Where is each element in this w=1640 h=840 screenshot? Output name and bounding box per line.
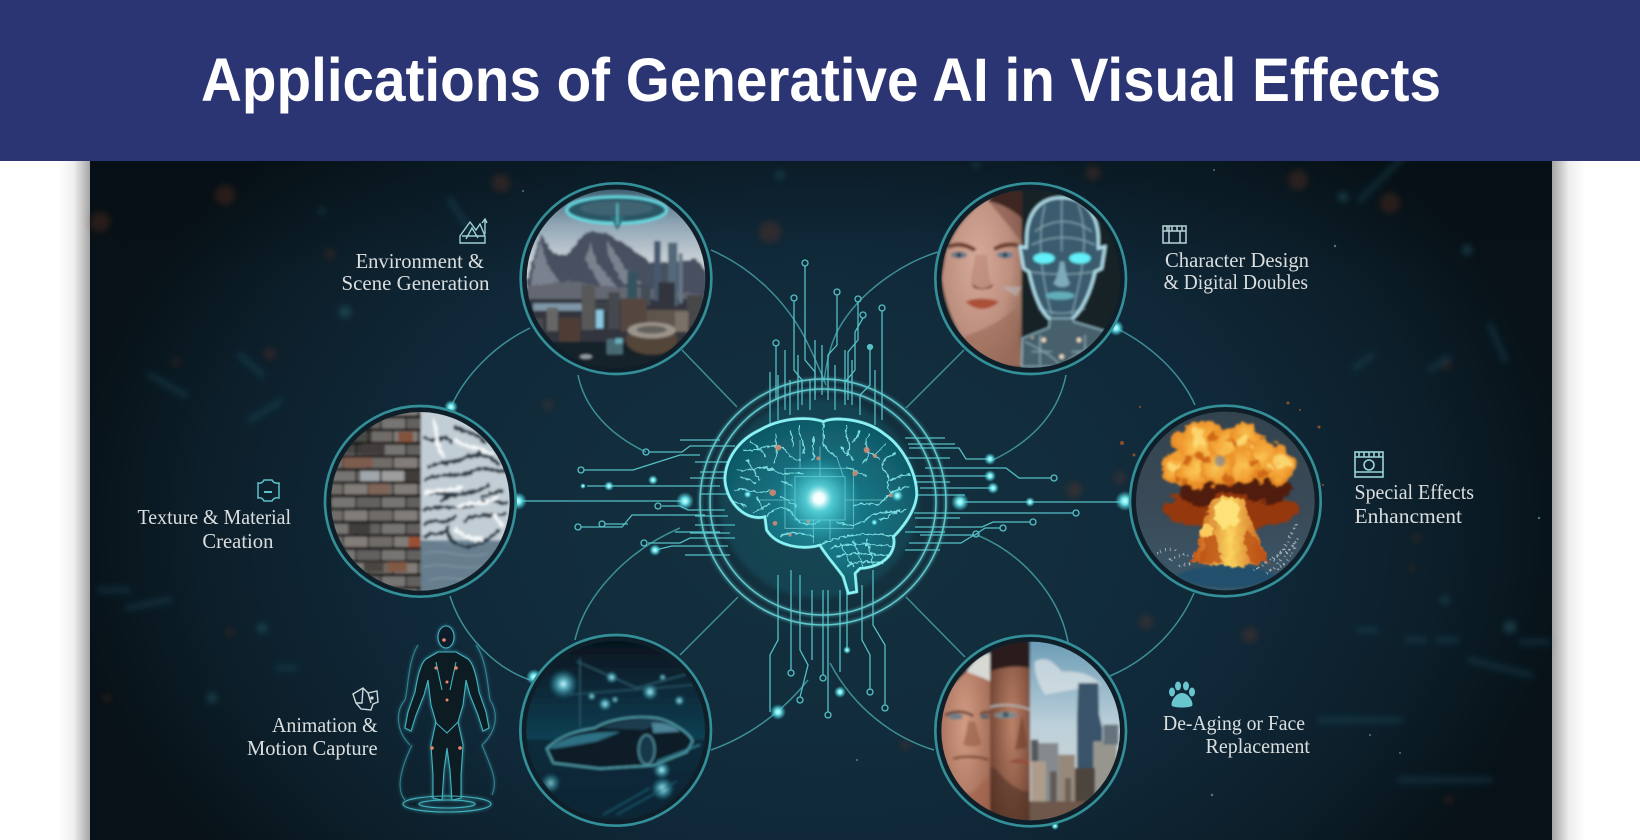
- topic: special effects enhancement: [1120, 402, 1474, 597]
- brain microchip core: [760, 440, 887, 543]
- label: [342, 249, 490, 295]
- label: [247, 713, 378, 760]
- icon: ornate frame: [258, 480, 279, 501]
- topic: environment and scene generation: [342, 183, 711, 382]
- picture circle: split faces and skyline: [935, 636, 1127, 830]
- circuit traces: left side: [518, 440, 735, 555]
- icon: paw print: [1169, 682, 1195, 708]
- label: Character Design: [1165, 248, 1309, 272]
- topic: de-aging or face replacement: [935, 636, 1310, 830]
- circuit traces: right side: [905, 438, 1125, 550]
- label: Special Effects: [1354, 480, 1474, 504]
- icon: dice cluster: [353, 688, 378, 710]
- header banner: [0, 0, 1640, 161]
- circuit traces: top: [770, 260, 885, 430]
- label: Motion Capture: [247, 736, 378, 760]
- picture circle: explosion: [1130, 406, 1321, 597]
- label: [1163, 711, 1310, 758]
- label: Enhancment: [1354, 504, 1462, 528]
- picture circle: sports car: [520, 635, 711, 826]
- picture circle: mountains and city: [521, 183, 711, 382]
- circuit traces: bottom: [770, 570, 888, 718]
- connecting arcs between topic circles: [450, 250, 1195, 750]
- flying embers: [1120, 402, 1324, 486]
- motion capture figure: [398, 626, 495, 812]
- label: [1354, 480, 1474, 528]
- label: De-Aging or Face: [1163, 711, 1305, 735]
- brain central light: [777, 457, 861, 540]
- picture circle: face and wireframe head: [935, 183, 1128, 375]
- label: Replacement: [1206, 734, 1310, 758]
- topic: character design and digital doubles: [935, 183, 1309, 375]
- icon: film clapper: [1163, 226, 1186, 243]
- label: Environment &: [356, 249, 484, 273]
- floating saucer: [567, 197, 667, 230]
- panel: dark technology backdrop: [90, 140, 1552, 840]
- bokeh and streak particles: [90, 140, 1548, 804]
- label: [138, 505, 291, 553]
- left panel shadow: [58, 161, 90, 840]
- label: [1164, 248, 1309, 294]
- capture markers: [430, 638, 462, 750]
- central rings: [700, 379, 946, 625]
- glowing circuit nodes: [444, 320, 1135, 830]
- brain hot spots: [769, 445, 893, 537]
- brain folds: [730, 422, 910, 567]
- right panel shadow: [1552, 161, 1586, 840]
- brain outline: [725, 419, 917, 593]
- label: Creation: [202, 529, 274, 553]
- particle sparks: [522, 169, 1540, 796]
- icon: mountain chart: [460, 219, 487, 243]
- label: & Digital Doubles: [1164, 270, 1308, 294]
- central glowing brain: [719, 398, 919, 598]
- topic: animation and motion capture: [247, 626, 711, 826]
- icon: film frame with camera: [1355, 452, 1383, 477]
- title: Applications of Generative AI in Visual Effects: [201, 46, 1441, 114]
- label: Texture & Material: [138, 505, 291, 529]
- label: Scene Generation: [342, 271, 490, 295]
- picture circle: brick and metal: [325, 406, 518, 597]
- topic: texture and material creation: [138, 406, 518, 597]
- label: Animation &: [272, 713, 378, 737]
